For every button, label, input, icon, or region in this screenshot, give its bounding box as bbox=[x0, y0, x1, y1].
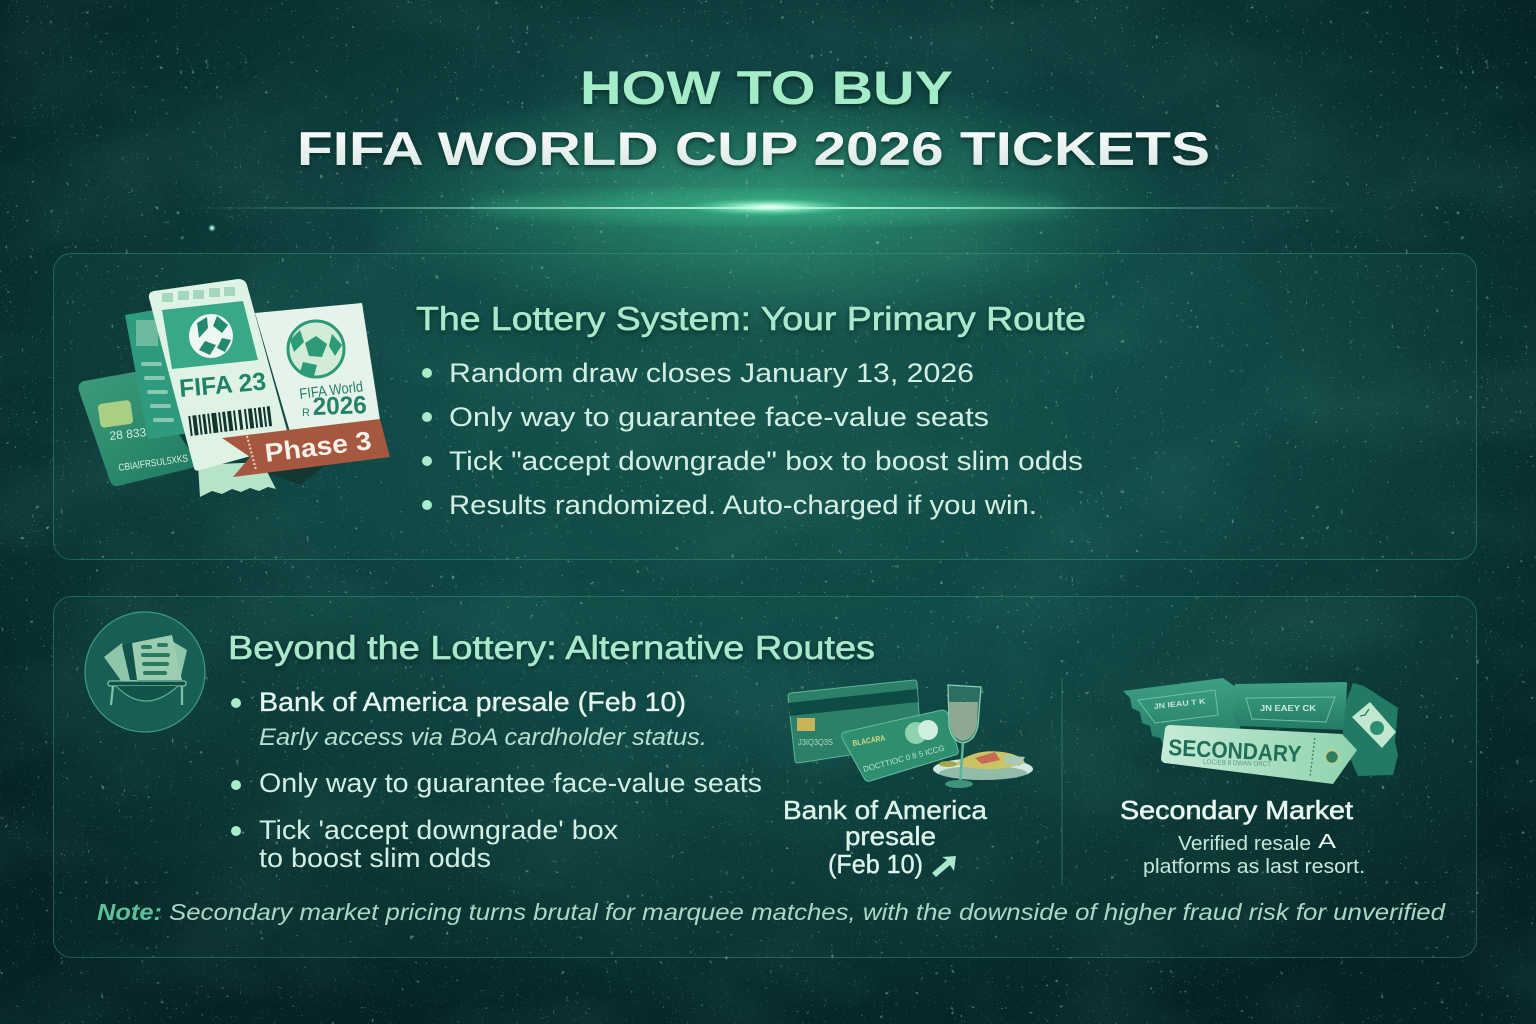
bullet list: lottery: Only way to guarantee face-value seats bbox=[449, 402, 989, 432]
icon: back ticket middle bbox=[1232, 682, 1347, 730]
caption: secondary market: Secondary Market bbox=[1120, 795, 1354, 825]
title: HOW TO BUY bbox=[580, 61, 953, 114]
icon: front bank card bbox=[842, 710, 958, 781]
panel: alternative routes bbox=[54, 596, 1476, 958]
caption: bank of america: (Feb 10) bbox=[828, 849, 923, 879]
bullet list: alternative routes: Tick 'accept downgrade' box bbox=[259, 815, 619, 845]
icon: back bank card bbox=[788, 680, 921, 763]
icon: up-right arrow bbox=[932, 856, 956, 877]
caption: secondary market: platforms as last resort. bbox=[1143, 856, 1365, 878]
bullet list: alternative routes: Bank of America presale (Feb 10) bbox=[259, 687, 686, 717]
caption: bank of america bbox=[783, 795, 988, 879]
heading: alternative routes: Beyond the Lottery: Alternative Routes bbox=[228, 629, 875, 666]
icon: back ticket middle: JN EAEY CK bbox=[1260, 704, 1316, 713]
icon: secondary tag: SECONDARY bbox=[1168, 734, 1302, 767]
caption: secondary market bbox=[1120, 795, 1365, 878]
caption: secondary market: Verified resale bbox=[1178, 833, 1311, 855]
illustration: lottery tickets and card bbox=[79, 279, 390, 497]
caption: secondary market: A bbox=[1318, 831, 1337, 853]
caption: bank of america: Bank of America bbox=[783, 795, 988, 825]
icon: phase 3 ribbon bbox=[222, 419, 390, 485]
note: Secondary market pricing turns brutal for marquee matches, with the downside of higher fraud risk for unverified bbox=[169, 899, 1446, 925]
bullet list: alternative routes: Early access via BoA cardholder status. bbox=[259, 724, 707, 751]
icon: world cup paper: FIFA World bbox=[298, 378, 364, 403]
glowing divider bbox=[180, 191, 1360, 232]
note: Note: bbox=[97, 899, 162, 925]
icon: plate of food bbox=[933, 751, 1033, 780]
icon: green back ticket bbox=[125, 309, 190, 439]
bullet list: alternative routes: to boost slim odds bbox=[259, 843, 491, 873]
icon: ticket stub bbox=[198, 462, 276, 497]
heading: lottery: The Lottery System: Your Primary Route bbox=[416, 300, 1086, 337]
bullet list: alternative routes bbox=[231, 687, 762, 873]
icon: world cup paper: 2026 bbox=[312, 391, 367, 421]
icon: white ticket bbox=[149, 279, 291, 471]
title bbox=[297, 61, 1210, 175]
illustration: secondary market tickets bbox=[1123, 678, 1398, 784]
icon: world cup paper: R bbox=[302, 407, 310, 419]
icon: back ticket left bbox=[1123, 678, 1240, 748]
illustration: bank cards, champagne and plate bbox=[788, 680, 1033, 788]
icon: back bank card: J3IQ3Q3S bbox=[798, 738, 833, 747]
bullet list: lottery: Tick "accept downgrade" box to boost slim odds bbox=[449, 446, 1083, 476]
icon: world cup paper bbox=[255, 303, 380, 432]
title: FIFA WORLD CUP 2026 TICKETS bbox=[297, 122, 1210, 175]
icon: green payment card: 28 833 bbox=[109, 425, 147, 443]
icon: back ticket left: JN IEAU T K bbox=[1153, 697, 1207, 711]
icon: white ticket: FIFA 23 bbox=[178, 368, 267, 403]
caption: bank of america: presale bbox=[845, 821, 936, 851]
icon: secondary tag: LOC/EB 8 DWAN ORCT bbox=[1203, 759, 1272, 768]
bullet list: lottery: Random draw closes January 13, 2026 bbox=[449, 358, 974, 388]
icon: round document badge bbox=[85, 612, 205, 732]
icon: phase 3 ribbon: Phase 3 bbox=[263, 425, 373, 468]
icon: front bank card: BLACARA bbox=[852, 733, 886, 748]
icon: green payment card bbox=[79, 372, 200, 486]
bullet list: lottery: Results randomized. Auto-charged if you win. bbox=[449, 490, 1037, 520]
icon: champagne glass bbox=[945, 685, 981, 788]
bullet list: lottery bbox=[422, 358, 1083, 520]
icon: secondary tag bbox=[1161, 725, 1357, 784]
icon: front bank card: DOCTTIOC 0 8 5 ICCG bbox=[862, 743, 946, 774]
icon: back ticket right stack bbox=[1342, 683, 1398, 776]
panel: lottery system bbox=[54, 254, 1476, 560]
icon: green payment card: CBIAIFRSUL5XKS bbox=[118, 453, 189, 474]
icon: white hang tag bbox=[1352, 702, 1396, 748]
bullet list: alternative routes: Only way to guarantee face-value seats bbox=[259, 768, 762, 798]
